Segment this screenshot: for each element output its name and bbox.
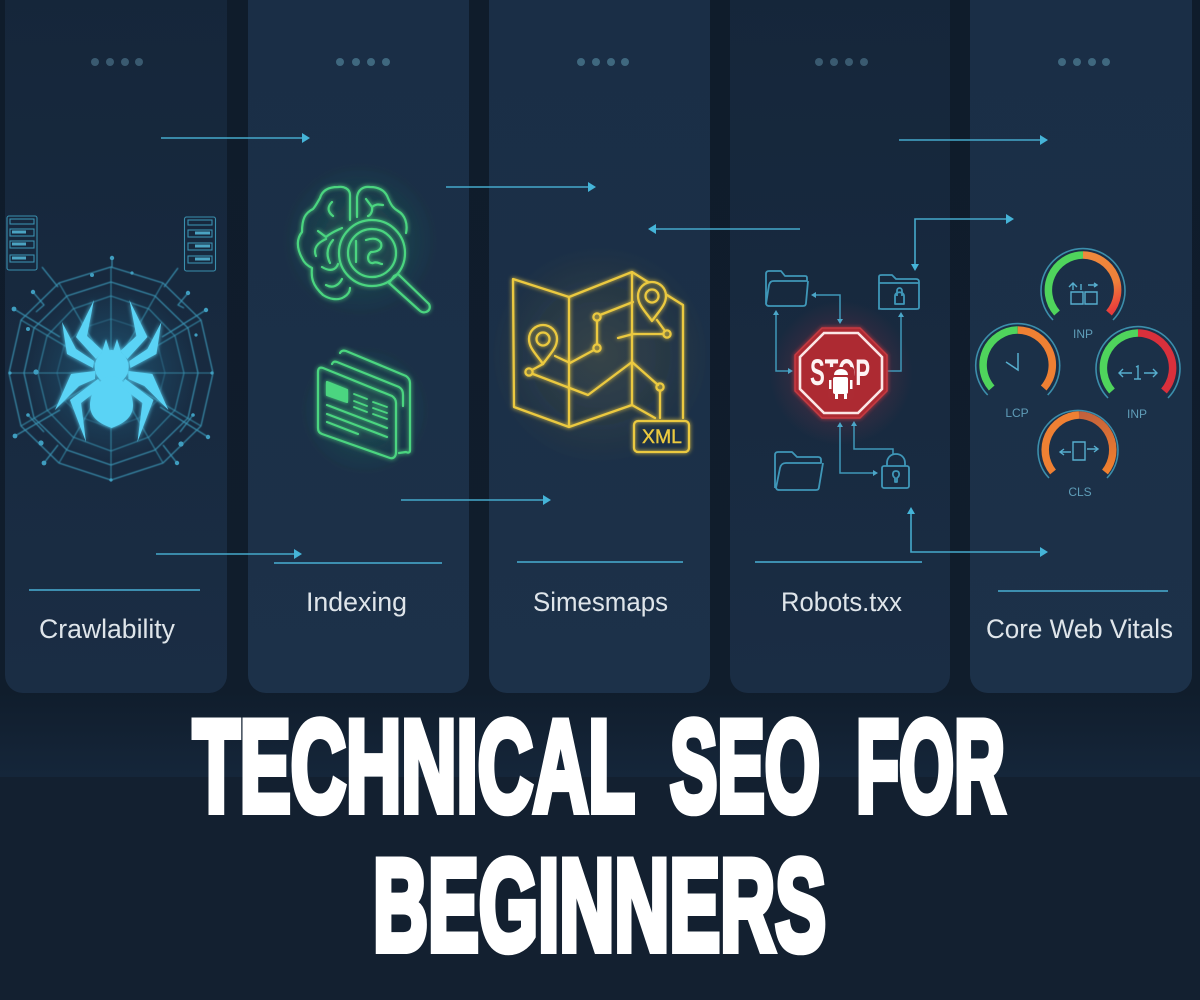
icon: index cards	[300, 345, 430, 475]
panel: core web vitals	[970, 0, 1192, 693]
arrow: elbow bottom to vitals	[907, 507, 1048, 557]
spider	[55, 300, 168, 442]
divider: sitemaps	[517, 561, 683, 563]
dots: crawlability	[91, 58, 143, 66]
divider: vitals	[998, 590, 1168, 592]
label: indexing: Indexing	[306, 587, 407, 617]
icon: left server	[7, 216, 37, 270]
web	[9, 258, 213, 480]
icon: stop sign	[795, 328, 887, 418]
dots: sitemaps	[577, 58, 629, 66]
gauge: top inp	[1041, 249, 1125, 341]
arrow: robots to vitals top	[899, 135, 1048, 145]
panel: sitemaps	[489, 0, 710, 693]
icon: brain with magnifier	[282, 162, 438, 318]
gauge: right inp	[1096, 327, 1180, 421]
gauge: cls	[1038, 410, 1118, 499]
divider: robots	[755, 561, 922, 563]
label: vitals: Core Web Vitals	[986, 614, 1173, 644]
divider: crawlability	[29, 589, 200, 591]
label: robots: Robots.txx	[781, 587, 902, 617]
arrow: indexing to sitemaps top	[446, 182, 596, 192]
label: xml: XML	[642, 427, 682, 448]
title word: beginners: BEGINNERS	[373, 832, 826, 978]
title word: seo: SEO	[670, 693, 820, 839]
icon: android robot	[828, 367, 854, 400]
label: top inp: INP	[1073, 327, 1093, 341]
divider: indexing	[274, 562, 442, 564]
folders	[766, 271, 919, 490]
connectors	[776, 295, 901, 473]
dots: indexing	[336, 58, 390, 66]
label: crawlability: Crawlability	[39, 614, 175, 644]
label: lcp: LCP	[1005, 406, 1029, 420]
label: right inp: INP	[1127, 407, 1147, 421]
dots: robots	[815, 58, 868, 66]
arrow: indexing to sitemaps bottom	[401, 495, 551, 505]
icon: xml map	[490, 245, 710, 465]
label: cls: CLS	[1068, 485, 1092, 499]
panel: indexing	[248, 0, 469, 693]
web nodes	[8, 256, 214, 482]
panel: crawlability	[5, 0, 227, 693]
connector arrowheads	[773, 292, 904, 476]
title word: for: FOR	[856, 693, 1005, 839]
title word: technical: TECHNICAL	[193, 693, 635, 839]
panel: robots	[730, 0, 950, 693]
icon: right server	[184, 217, 216, 271]
title	[193, 693, 1005, 978]
arrow: elbow to folder and vitals	[911, 214, 1014, 271]
arrow: robots to sitemaps	[648, 224, 800, 234]
stop text: STOP	[810, 352, 870, 393]
arrow: crawlability to indexing top	[161, 133, 310, 143]
label: sitemaps: Simesmaps	[533, 587, 668, 617]
gauge: lcp	[976, 324, 1060, 420]
dots: vitals	[1058, 58, 1110, 66]
icon: spider on web	[7, 216, 216, 482]
arrow: crawlability to indexing bottom	[156, 549, 302, 559]
icon: robots diagram	[766, 271, 919, 490]
